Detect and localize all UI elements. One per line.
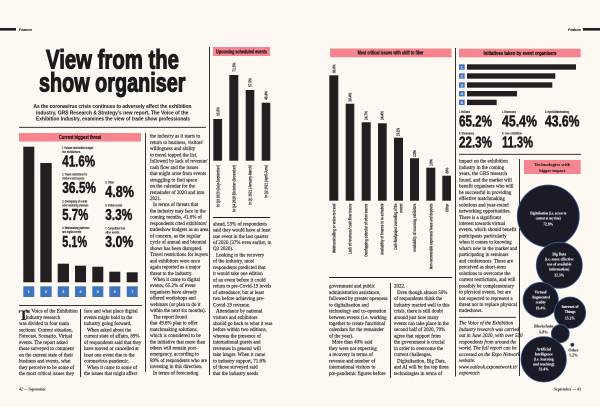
numbered keys: 1 xyxy=(28,289,31,294)
body text: column 4: take longer. When it came xyxy=(213,353,266,358)
axis labels: In Q2 2021 (April-June) xyxy=(264,165,268,198)
body text: column 4: to industry support, 71.6% xyxy=(213,359,266,364)
body text: column 7: tradeshows. xyxy=(459,309,483,314)
source note: out in June 2020, with over 550 xyxy=(459,334,523,339)
numbered keys: 4 xyxy=(79,289,82,294)
body text: column 7: current restrictions, and will xyxy=(459,278,516,283)
bubble: artificial intelligence: 33.4% xyxy=(539,368,549,372)
body text: column 5: government and public xyxy=(329,285,376,290)
stat: 5.7%: 3. Overlapping of events xyxy=(62,199,87,203)
stat: 43.6%: 3. Hybrid/Matchmaking xyxy=(545,110,569,114)
value labels: 19.2% xyxy=(396,128,400,136)
value labels xyxy=(216,63,268,116)
body text: column 1: was divided in four main xyxy=(19,322,69,327)
bubble: artificial intelligence xyxy=(521,337,566,382)
stat: 3.0%: 7. Competition from xyxy=(105,226,125,230)
body text: column 6: Digitalisation, Big Data, xyxy=(397,359,446,364)
panel: initiatives taken by event organisers xyxy=(459,49,581,152)
source note: accessed on the Expo Network xyxy=(459,353,521,358)
body text: column 7: participants particularly xyxy=(459,234,507,239)
body text: column 4: Attendance by national xyxy=(216,310,263,315)
bubble: digitalisation: Digitalisation (i.e. access to xyxy=(530,211,566,215)
bubble: big data: Big Data xyxy=(552,252,566,256)
body text: column 7: impact on the exhibition xyxy=(459,160,508,165)
horizontal bar chart: 1 xyxy=(461,64,464,69)
body text: column 7: There is a significant xyxy=(459,216,502,221)
body text: column 3: emergency, according to xyxy=(150,353,199,358)
heading bar: Initiatives taken by event organisers xyxy=(484,51,556,57)
body text: column 3: In terms of threats that xyxy=(153,203,199,208)
body text: column 3: within the next six months). xyxy=(150,309,206,314)
body text: column 3: on the calendar for the xyxy=(150,185,196,190)
body text: column 6: Even though almost 50% xyxy=(397,291,447,296)
body text: column 7: threat nor to replace physical xyxy=(459,303,518,308)
drop cap: T xyxy=(19,308,29,324)
body text: column 7: perceived as short-term xyxy=(459,266,506,271)
body text: column 6: the government is crucial xyxy=(394,341,445,346)
body text: column 4: of 2020 (37% even earlier, in xyxy=(213,241,272,246)
stat: 5.1%: 4. Matchmaking platforms xyxy=(62,226,89,230)
dividers xyxy=(19,47,581,378)
body text: column 6: current challenges. xyxy=(394,353,432,358)
folio: right page: September — 43 xyxy=(554,386,582,392)
stat: 41.6% xyxy=(62,146,95,171)
body text: column 1: the most critical issues they xyxy=(19,372,75,377)
value labels: 33.9% xyxy=(216,107,220,116)
stat: 45.4%: 2. Showrooms xyxy=(502,110,516,114)
body text: column 7: when it comes to knowing xyxy=(459,241,512,246)
bar chart xyxy=(329,75,451,201)
stat: 22.3% xyxy=(459,132,492,152)
heading bar: Upcoming scheduled events xyxy=(216,49,267,55)
body text: column 3: shows has been disrupted. xyxy=(150,247,202,252)
body text: column 3: the industry may face in the xyxy=(150,209,206,214)
heading bar: Current biggest threat xyxy=(59,135,101,141)
body text: column 3: matchmaking solutions, xyxy=(150,328,198,333)
body text: column 3: return to business, visitors' xyxy=(150,141,203,146)
body text: column 6: 2022. xyxy=(394,285,405,290)
bubble: other xyxy=(568,343,579,358)
body text: column 3: tradeshow budgets as an area xyxy=(150,228,209,233)
body text: column 2: least one event due to the xyxy=(84,353,135,358)
axis labels: event xyxy=(398,203,404,213)
body text: column 2: face and what place digital xyxy=(84,310,138,315)
body text: column 3: which is considered to be xyxy=(150,334,202,339)
body text: column 7: to physical events, but are xyxy=(459,291,512,296)
body text: column 4: whereas the presence of xyxy=(213,334,261,339)
axis labels: Lack of revenues/ cash flow issues xyxy=(348,203,352,254)
body text: column 3: organisers have already xyxy=(150,290,198,295)
body text: column 6: and AI will be the top three xyxy=(394,366,449,371)
body text: column 7: solutions and year-round xyxy=(459,203,509,208)
body text: column 4: of those surveyed said xyxy=(213,366,258,371)
standfirst: As the coronavirus crisis continues to adversely affect the exhibition xyxy=(34,104,192,110)
body text: column 3: willingness and ability xyxy=(150,147,196,152)
body text: column 6: second half of 2020, 70% xyxy=(394,328,445,333)
stat: 3.3%: 3.3% xyxy=(105,207,133,224)
section marker: left page: Feature xyxy=(19,28,32,32)
value labels: 24.4% xyxy=(380,111,384,120)
stat: 41.6%: 41.6% xyxy=(62,154,95,171)
body text: column 7: industry in the coming xyxy=(459,166,505,171)
panel: upcoming scheduled events xyxy=(213,47,270,212)
stat: 5.1% xyxy=(62,226,89,251)
value labels: 8% xyxy=(444,167,450,174)
body text: column 7: not expected to represent a xyxy=(459,297,513,302)
folio: left page: 42 — September xyxy=(19,386,46,392)
body text: column 6: industry reacted well to this xyxy=(394,303,450,308)
stat: 5.7%: other marketing channels xyxy=(62,203,88,207)
body text: column 5: a recovery in terms of xyxy=(329,353,373,358)
axis labels: Availability of finance to re-schedule xyxy=(380,203,384,255)
bar chart xyxy=(23,147,138,282)
body text: column 1: Industry research xyxy=(26,316,61,321)
body text: column 3: of concern, as the regular xyxy=(150,234,201,239)
axis labels: Cash-flow/project overselling of the xyxy=(393,203,398,250)
body text: column 4: of an event before it could xyxy=(213,278,266,283)
heading box: Technologies with xyxy=(534,162,571,167)
body text: column 7: solutions to overcome the xyxy=(459,272,511,277)
bubble: internet of things: Things xyxy=(565,310,576,314)
axis labels: Other xyxy=(444,203,450,212)
value labels: 48.4% xyxy=(264,91,268,100)
body text: column 1: they perceive to be some of xyxy=(19,366,74,371)
body text: column 6: around just how many xyxy=(394,316,439,321)
stat: 11.3%: 5. Live exhibition xyxy=(502,132,522,136)
body text: column 5: of the year). xyxy=(329,334,353,339)
body text: column 4: Q3 2020). xyxy=(213,247,233,252)
body text: column 6: events can take place in the xyxy=(394,322,450,327)
body text: column 4: Looking to the recovery xyxy=(216,253,265,258)
stat: 41.6%: for exhibitors xyxy=(62,150,80,154)
stat: 43.6% xyxy=(545,110,580,131)
body text: column 3: respondents cited exhibitors' xyxy=(150,222,207,227)
body text: column 5: together to create functional xyxy=(329,322,386,327)
heading bar: Most critical issues with shift to fiber xyxy=(358,51,424,57)
value labels: 10% xyxy=(428,159,434,166)
stat: 22.3%: 4. Showcases xyxy=(459,132,474,136)
body text: column 2: When it came to some of xyxy=(87,366,137,371)
body text: column 4: return to pre-Covid-19 levels xyxy=(213,285,271,290)
body text: column 3: Travel restrictions for buyers xyxy=(150,253,208,258)
axis labels: Non-recoverable expenses/ lease and deposits xyxy=(428,203,434,269)
body text: column 4: it would take one edition xyxy=(213,272,263,277)
body text: column 4: should go back to what it was xyxy=(213,322,272,327)
source note: Industry research was carried xyxy=(458,328,520,333)
stat: 11.3%: 11.3% xyxy=(502,135,533,152)
body text: column 5: pre-pandemic figures before xyxy=(329,372,386,377)
body text: column 7: what's new in the market and xyxy=(459,247,518,252)
source note: exporeach xyxy=(459,372,480,377)
body text: column 7: and conferences. These are xyxy=(459,259,514,264)
bubble: artificial intelligence: and teaching) xyxy=(533,362,555,366)
panel: current biggest threat xyxy=(19,133,141,297)
body text: column 4: international guests and xyxy=(213,341,261,346)
body text: column 3: struggling to find space xyxy=(150,178,198,183)
body text: column 1: on the current state of their xyxy=(19,353,73,358)
body text: column 3: events, 65.2% of event xyxy=(150,284,196,289)
stat: 3.3% xyxy=(105,203,133,224)
body text: column 7: interest towards virtual xyxy=(459,222,506,227)
section marker: right page: Feature xyxy=(568,28,581,32)
body text: column 3: to travel topped the list, xyxy=(150,153,197,158)
body text: column 3: the initiative that more than xyxy=(150,340,206,345)
panel: most critical issues xyxy=(329,48,452,269)
title: show organiser xyxy=(39,68,186,98)
bubble: internet of things: 15.2% xyxy=(565,316,575,320)
bubble: virtual reality: Augmented xyxy=(532,296,551,300)
bubble: blockchain xyxy=(534,324,569,343)
value labels: 38.8% xyxy=(332,64,336,73)
body text: column 3: others will remain post- xyxy=(150,347,198,352)
stat: 36.5%: 2. Travel restrictions for xyxy=(62,173,88,177)
body text: column 2: industry going forward. xyxy=(84,322,131,327)
stat: 5.7% xyxy=(62,199,89,224)
bubble: artificial intelligence: Intelligence xyxy=(535,352,553,356)
stat: 22.3%: 22.3% xyxy=(459,135,492,152)
body text: column 7: participating in seminars xyxy=(459,253,508,258)
body text: column 3: the industry as it starts to xyxy=(150,135,201,140)
bubble: virtual reality: Virtual/ xyxy=(535,290,548,294)
horizontal bar chart: 3 xyxy=(461,82,464,87)
bubble: virtual reality: reality xyxy=(536,300,546,304)
stat: 4.8%: 4.8% xyxy=(105,184,134,201)
body text: column 3: coming months, 41.6% of xyxy=(150,216,202,221)
body text: column 4: ahead, 53% of respondents xyxy=(213,222,267,227)
standfirst: industry, GRS Research & Strategy's new report, The Voice of the xyxy=(36,111,188,117)
bubble: other: 1.2% xyxy=(569,353,578,358)
body text: column 5: to digitalisation and xyxy=(329,303,369,308)
body text: column 3: The report found xyxy=(153,315,187,320)
body text: column 7: possibly be complementary xyxy=(459,284,514,289)
bubble: other: Other xyxy=(568,348,579,352)
numbered keys: 5 xyxy=(97,289,100,294)
source note: The Voice of the Exhibition xyxy=(459,321,514,326)
body text: column 7: be successful in providing xyxy=(459,191,512,196)
bar chart xyxy=(213,75,270,161)
body text: column 3: again reported as a major xyxy=(150,266,201,271)
body text: column 3: webinars (or plan to do it xyxy=(150,303,201,308)
body text: column 3: In terms of forecasting xyxy=(153,371,199,376)
stat: 65.2%: 1. Webinars xyxy=(459,110,470,114)
body text: column 1: he Voice of the Exhibition xyxy=(26,310,78,315)
body text: column 3: 2021. xyxy=(150,197,161,202)
source note: respondents from around the xyxy=(459,340,517,345)
body text: column 3: and exhibitors were once xyxy=(150,259,201,264)
source note: world. The full report can be xyxy=(459,347,517,352)
body text: column 2: When asked about the xyxy=(87,328,132,333)
body text: column 4: that the industry needs xyxy=(213,372,258,377)
body text: column 2: events might hold in the xyxy=(84,316,133,321)
body text: column 3: cycle of annual and biennial xyxy=(150,241,207,246)
body text: column 7: effective matchmaking xyxy=(459,197,505,202)
bubble: virtual reality: 19.4% xyxy=(536,306,546,310)
value labels: 13% xyxy=(412,150,417,157)
numbered keys: 3 xyxy=(62,289,65,294)
stat: 4.8%: 5. Other xyxy=(105,180,115,184)
value labels xyxy=(332,64,450,174)
body text: column 3: 89% of respondents who are xyxy=(150,359,208,364)
body text: column 3: When it came to digital xyxy=(153,278,201,283)
body text: column 3: remainder of 2020 and into xyxy=(150,191,205,196)
body text: column 7: years, the GRS research xyxy=(459,172,508,177)
bubble: digitalisation: 72.9% xyxy=(543,222,554,226)
body text: column 7: found, and the market will xyxy=(459,178,513,183)
bubble: internet of things xyxy=(554,297,586,328)
body text: column 3: threat to the industry. xyxy=(150,272,192,277)
stat: 3.0%: 3.0% xyxy=(105,234,134,251)
numbered keys: 6 xyxy=(114,289,117,294)
body text: column 7: events, which should benefit xyxy=(459,228,517,233)
body text: column 6: crisis, there is still doubt xyxy=(394,310,444,315)
body text: column 5: they were not expecting xyxy=(329,347,377,352)
body text: column 4: respondents predicted that xyxy=(213,266,266,271)
bubble: artificial intelligence: Artificial xyxy=(537,348,551,352)
axis labels: In Q4 2020 (October-December) xyxy=(232,165,236,212)
body text: column 3: followed by lack of revenue/ xyxy=(150,160,208,165)
body text: column 6: of respondents think the xyxy=(394,297,443,302)
body text: column 4: Covid-19 revenue. xyxy=(213,303,250,308)
body text: column 4: one event in the last quarter xyxy=(213,235,269,240)
bubble: internet of things: Internet of xyxy=(562,305,579,309)
horizontal bar chart xyxy=(459,64,576,105)
body text: column 6: in order to overcome the xyxy=(394,347,444,352)
horizontal bar chart: 5 xyxy=(461,100,464,105)
stat: 65.2% xyxy=(459,110,492,131)
body text: column 2: the issues that might affect xyxy=(84,372,138,377)
axis labels xyxy=(216,165,268,212)
body text: column 4: visitors and exhibitors xyxy=(213,316,257,321)
bubble: virtual reality xyxy=(523,282,558,318)
stat: 5.1%: 5.1% xyxy=(62,234,87,251)
body text: column 4: revenues in general will xyxy=(213,347,262,352)
body text: column 5: followed by greater openness xyxy=(329,297,388,302)
body text: column 2: current state of affairs, 89% xyxy=(84,335,140,340)
body text: column 2: have moved or cancelled at xyxy=(84,347,139,352)
title: View from the xyxy=(46,44,179,74)
stat: 65.2%: 65.2% xyxy=(459,114,492,131)
value labels: 71.5% xyxy=(232,63,236,72)
heading box xyxy=(524,160,581,174)
body text: column 1: Forecast, Scenario, Virtual xyxy=(19,335,73,340)
body text: column 3: that 49.6% plan to offer xyxy=(150,322,198,327)
body text: column 2: coronavirus pandemic. xyxy=(84,360,130,365)
source note: website. xyxy=(459,359,475,364)
bubble: artificial intelligence: (i.e. learning xyxy=(534,358,554,362)
section marker: right page xyxy=(568,28,600,32)
body text: column 4: said they would have at least xyxy=(213,229,271,234)
body text: column 5: between events (i.e. working xyxy=(329,316,387,321)
body text: column 5: calendars for the remainder xyxy=(329,328,384,333)
body text: column 5: international visitors to xyxy=(329,366,376,371)
body text: column 5: More than 40% said xyxy=(332,341,373,346)
heading bar xyxy=(213,47,270,56)
body text: column 1: business and events, what xyxy=(19,360,71,365)
numbered keys xyxy=(23,286,138,297)
horizontal bar chart: 2 xyxy=(461,73,464,78)
axis labels: In Q1 2021 (January-March) xyxy=(248,165,252,205)
body text: column 4: two before achieving pre- xyxy=(213,297,265,302)
stat: 43.6%: 43.6% xyxy=(545,114,580,131)
horizontal bar chart: 4 xyxy=(461,91,464,96)
stat: 36.5%: 36.5% xyxy=(62,180,96,197)
body text: column 1: events. The report asked xyxy=(19,341,68,346)
stat: 36.5%: visitors and buyers xyxy=(62,177,84,181)
bubble: big data xyxy=(536,242,582,288)
bubble: big data: information) xyxy=(549,268,570,272)
stat: 45.4% xyxy=(502,110,537,131)
heading bar xyxy=(19,133,141,142)
body text: column 7: benefit organisers who will xyxy=(459,185,514,190)
body text: column 5: administration assistance, xyxy=(329,291,380,296)
body text: column 5: technology and co-operation xyxy=(329,310,387,315)
bubble: big data: use of available xyxy=(547,262,572,266)
heading box: bigger impact xyxy=(539,168,566,173)
body text: column 7: networking opportunities. xyxy=(459,210,511,215)
stat: 5.1%: and digital events xyxy=(62,230,81,234)
axis labels: Availability of sourcing exhibitors xyxy=(412,203,417,252)
axis labels: In Q3 2020 (July-September) xyxy=(216,165,220,207)
body text: column 3: investing in this direction. xyxy=(150,365,202,370)
stat: 41.6%: 1. Reduced trade/exhibitor budgets xyxy=(62,146,93,150)
heading bar xyxy=(330,48,452,57)
body text: column 3: cash flow and the issues xyxy=(150,166,198,171)
standfirst xyxy=(34,104,192,123)
value labels: 30.4% xyxy=(348,93,352,102)
body text: column 2: of respondents said that they xyxy=(84,341,142,346)
stat: 3.3%: 6. Virtual events xyxy=(105,203,122,207)
value labels: 57.5% xyxy=(248,78,252,87)
axis labels xyxy=(332,203,450,269)
stat: 45.4%: 45.4% xyxy=(502,114,537,131)
stat: 11.3% xyxy=(502,132,533,152)
bubble: digitalisation xyxy=(517,185,579,247)
bubble: digitalisation: content at any time) xyxy=(536,217,561,221)
bubble: blockchain: 6.8% xyxy=(539,330,548,334)
stat: 3.0% xyxy=(105,226,134,251)
body text: column 1: sections: Current situation, xyxy=(19,328,73,333)
body text: column 6: technologies in terms of xyxy=(394,372,443,377)
standfirst: Exhibition Industry, examines the view of trade show professionals xyxy=(36,117,190,123)
stat: 3.0%: other events xyxy=(105,230,119,234)
axis labels: Overlapping calendar of other events xyxy=(364,203,368,257)
stat: 36.5% xyxy=(62,173,96,197)
bubble: big data: 32.3% xyxy=(554,274,565,278)
bubble: big data: (i.e. more effective xyxy=(545,258,574,262)
body text: column 4: of attendance, but at least xyxy=(213,291,265,296)
body text: column 3: that might arise from events xyxy=(150,172,206,177)
body text: column 4: before within two editions, xyxy=(213,328,267,333)
body text: column 3: offered workshops and xyxy=(150,297,196,302)
body text: column 5: revenue and number of xyxy=(329,359,376,364)
body text: column 4: of the industry, most xyxy=(213,260,255,265)
body text: column 1: those surveyed to comment xyxy=(19,347,74,352)
stat: 5.7%: 5.7% xyxy=(62,207,89,224)
value labels: 24.7% xyxy=(364,111,368,120)
source note: www.outlook.exponetwork.it/ xyxy=(459,365,518,370)
axis labels: Webinars/calling or video-to-travel xyxy=(332,204,336,253)
bubble: blockchain: Blockchain xyxy=(534,324,554,328)
body text: column 6: agree that support from xyxy=(394,334,441,339)
section marker: left page xyxy=(0,28,32,32)
title xyxy=(39,44,186,98)
numbered keys: 7 xyxy=(131,289,134,294)
panel: technologies with bigger impact xyxy=(517,160,586,382)
numbered keys: 2 xyxy=(45,289,48,294)
